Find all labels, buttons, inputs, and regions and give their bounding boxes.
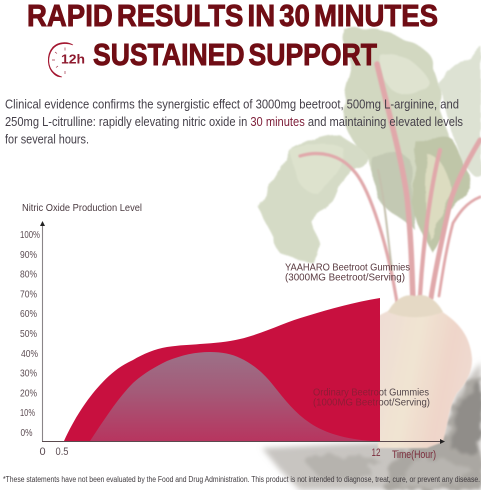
y axis labels: 50% — [20, 328, 37, 340]
area: ordinary curve — [90, 352, 372, 441]
leaves — [258, 27, 481, 262]
y axis title: Nitric Oxide Production Level — [22, 202, 142, 214]
y axis labels: 0% — [20, 427, 32, 439]
y axis labels — [20, 229, 40, 439]
area: yaaharo curve — [64, 298, 380, 441]
stems — [300, 64, 480, 302]
y axis labels: 90% — [20, 249, 37, 261]
x axis labels — [40, 446, 436, 461]
y axis arrowhead — [40, 221, 45, 226]
y axis labels: 80% — [20, 268, 37, 280]
y axis — [42, 224, 44, 441]
x axis labels: Time(Hour) — [392, 449, 436, 461]
chart: nitric oxide production level — [20, 202, 445, 461]
x axis labels: 0.5 — [56, 446, 68, 458]
series label: ordinary: (1000MG Beetroot/Serving) — [313, 396, 430, 408]
y axis labels: 10% — [20, 407, 35, 419]
x axis arrowhead — [440, 439, 445, 444]
y axis labels: 30% — [20, 368, 37, 380]
body text: for several hours. — [5, 132, 89, 146]
beet root — [378, 306, 472, 448]
title: sustained support: SUSTAINED SUPPORT — [93, 37, 377, 72]
icon: 12h clock: 12h — [61, 52, 85, 66]
beetroot photo illustration — [258, 27, 481, 490]
series label: yaaharo — [285, 262, 410, 284]
x axis labels: 12 — [372, 447, 380, 459]
y axis labels: 20% — [20, 388, 37, 400]
beet crown — [388, 295, 443, 317]
series label: ordinary — [313, 386, 430, 408]
series label: yaaharo: YAAHARO Beetroot Gummies — [285, 262, 410, 274]
body text: 250mg L-citrulline: rapidly elevating nitric oxide in 30 minutes and maintaining elevated levels — [5, 114, 463, 129]
x axis — [42, 440, 441, 442]
y axis labels: 100% — [20, 229, 40, 241]
x axis labels: 0 — [40, 446, 46, 458]
series label: yaaharo: (3000MG Beetroot/Serving) — [285, 272, 405, 284]
soil base — [262, 362, 481, 490]
icon: 12h clock — [48, 43, 85, 77]
body text — [5, 96, 463, 146]
y axis labels: 40% — [21, 348, 38, 360]
y axis labels: 60% — [20, 308, 37, 320]
series label: ordinary: Ordinary Beetroot Gummies — [313, 386, 429, 398]
soil clumps — [305, 375, 481, 490]
y axis labels: 70% — [20, 288, 37, 300]
